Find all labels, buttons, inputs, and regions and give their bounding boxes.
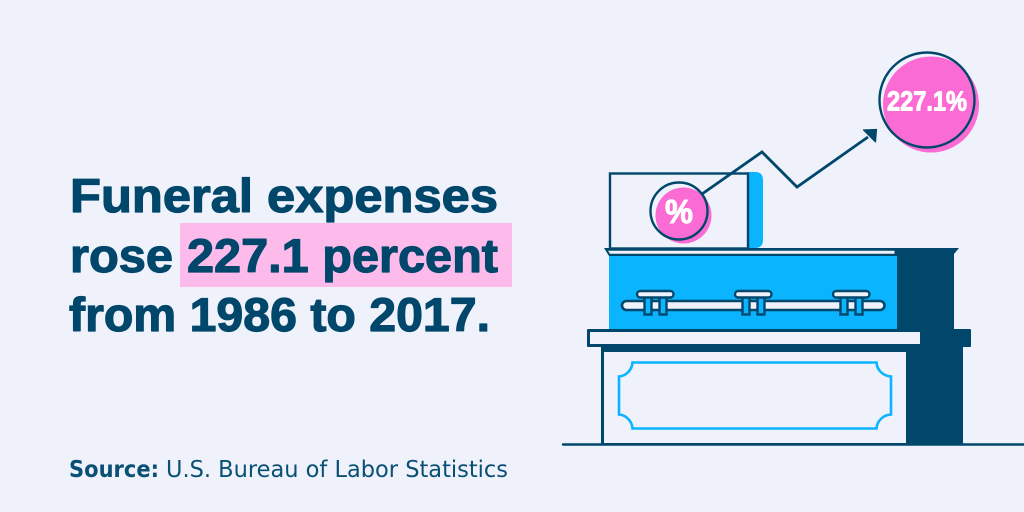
lid blue edge	[748, 172, 763, 248]
heading line 1: Funeral expenses	[70, 169, 498, 222]
casket body	[604, 248, 959, 329]
handle right	[833, 291, 870, 314]
highlight behind figure	[180, 223, 512, 287]
percent badge outline	[650, 182, 708, 240]
source line	[69, 457, 508, 483]
handle left	[637, 291, 674, 314]
stand plaque outline	[619, 362, 891, 428]
heading line 2: highlighted figure: 227.1 percent	[187, 229, 498, 282]
lid panel	[610, 174, 748, 248]
arrowhead	[864, 130, 876, 142]
illustration: casket with rising price arrow	[563, 52, 1024, 444]
casket stand	[587, 329, 971, 444]
casket blue front	[609, 256, 897, 329]
source name: U.S. Bureau of Labor Statistics	[166, 457, 508, 483]
result badge value: 227.1%	[887, 86, 967, 116]
heading line 3: from 1986 to 2017.	[69, 288, 490, 341]
stand slab light face	[590, 332, 920, 344]
casket rim highlight	[608, 251, 894, 254]
source label: Source:	[69, 457, 159, 483]
stand dark side	[601, 347, 963, 444]
percent badge	[650, 182, 712, 244]
handle middle	[735, 291, 772, 314]
stand front panel	[604, 352, 906, 443]
result badge	[880, 52, 979, 152]
casket open lid	[610, 172, 763, 248]
stand top slab	[587, 329, 971, 347]
heading line 2: rose: rose	[70, 229, 173, 282]
percent glyph: %	[665, 193, 693, 230]
rising arrow line	[702, 137, 868, 194]
heading: funeral expenses statistic	[69, 169, 512, 341]
result badge outline	[880, 52, 974, 148]
ground line	[563, 443, 1024, 446]
casket handle rail	[622, 301, 884, 310]
result badge pink fill	[883, 56, 979, 152]
percent badge pink fill	[656, 188, 712, 244]
casket dark side	[604, 248, 959, 329]
